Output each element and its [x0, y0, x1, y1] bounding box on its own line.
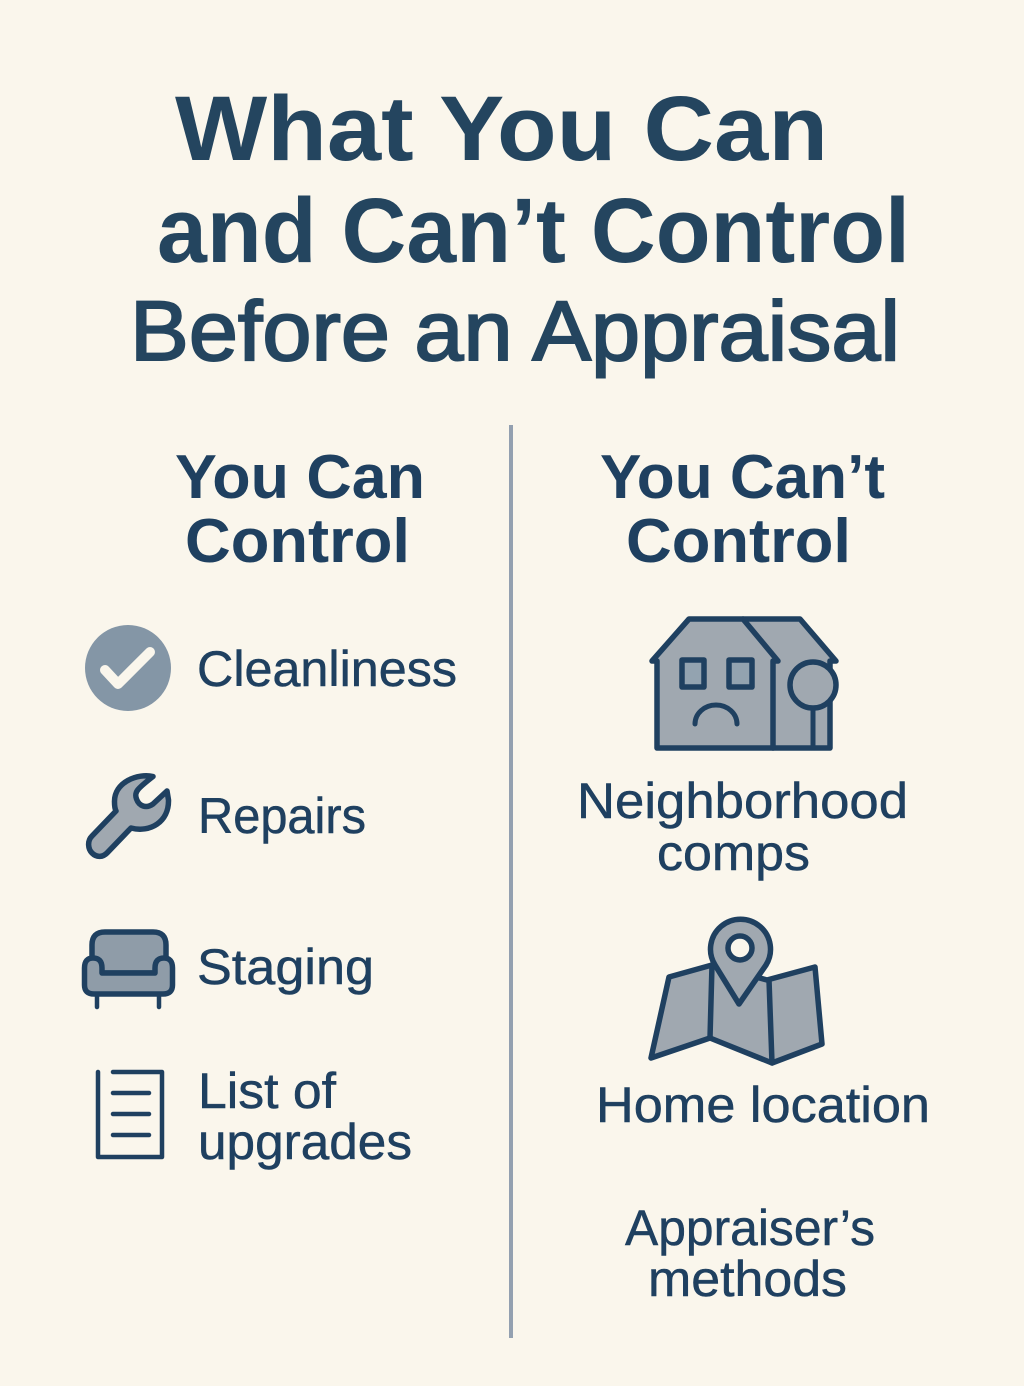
- text: cleanliness: Cleanliness: [197, 641, 457, 697]
- text: appraiser's methods: methods: [648, 1251, 847, 1307]
- text: home location: Home location: [596, 1077, 930, 1133]
- title: and Can’t Control: [157, 180, 910, 282]
- title: What You Can: [175, 78, 828, 180]
- text: list of upgrades: upgrades: [198, 1114, 412, 1170]
- heading: you can control: [175, 443, 425, 576]
- title: Before an Appraisal: [130, 284, 900, 378]
- heading: you can control: Control: [185, 507, 410, 576]
- icon: check circle: [85, 625, 171, 711]
- icon: armchair: [84, 932, 172, 1007]
- panel: you can't control: [577, 443, 930, 1307]
- text: neighborhood comps: Neighborhood: [577, 773, 908, 829]
- heading: you can't control: You Can’t: [600, 443, 885, 512]
- icon: map with pin: [651, 919, 822, 1063]
- heading: you can't control: [600, 443, 885, 576]
- text: neighborhood comps: [577, 773, 908, 881]
- text: list of upgrades: [198, 1063, 412, 1170]
- icon: document list: [98, 1072, 162, 1157]
- icon: sad house: [652, 619, 836, 748]
- text: neighborhood comps: comps: [657, 825, 810, 881]
- heading: you can control: You Can: [175, 443, 425, 512]
- text: repairs: Repairs: [198, 788, 366, 844]
- text: list of upgrades: List of: [198, 1063, 336, 1119]
- panel: you can control: [84, 443, 457, 1170]
- text: appraiser's methods: [625, 1200, 875, 1307]
- title: [130, 78, 910, 378]
- text: staging: Staging: [197, 939, 374, 995]
- icon: wrench: [89, 776, 169, 856]
- text: appraiser's methods: Appraiser’s: [625, 1200, 875, 1256]
- heading: you can't control: Control: [626, 507, 851, 576]
- center divider: [509, 425, 513, 1338]
